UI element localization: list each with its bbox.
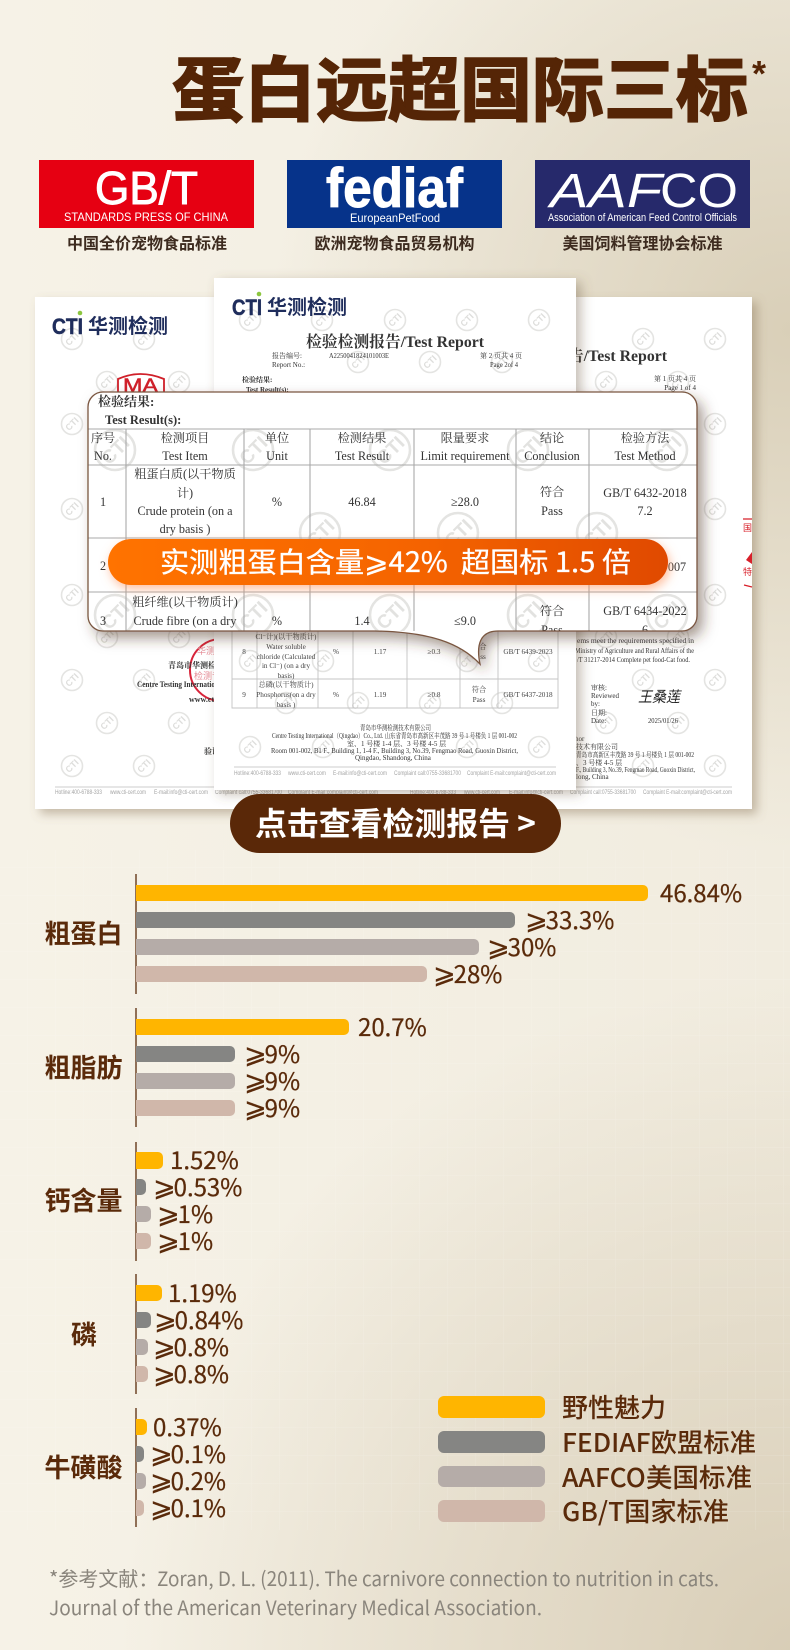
back report sheets: CTI [597,628,615,646]
back report sheets: CTI [597,373,615,391]
callout: test result table: 6 [642,623,648,637]
callout: test result table: dry basis ) [160,522,210,536]
back report sheets: CTI [170,373,188,391]
back report sheets: 检验检测报告/Test Report [489,346,668,365]
center report sheet: Complaint E-mail:complaint@cti-cert.com [467,771,556,777]
callout: test result table: Crude protein (on a [137,504,233,518]
center report sheet: 华测检测 [267,291,347,320]
back report sheets: CTI [52,314,83,339]
center report sheet: 检验检测报告/Test Report [306,332,485,351]
chart group: phosphorus [71,1274,243,1394]
center report sheet: CTI [458,738,476,756]
back report sheets: 特 [743,565,752,578]
chart group: calcium: 1.52% [170,1141,239,1176]
chart group: calcium: ⩾1% [157,1219,213,1258]
back report sheets: 技术有限公司 [576,742,618,751]
chart group: taurine: ⩾0.2% [150,1459,226,1498]
callout: test result table: 46.84 [348,495,376,509]
back report sheets: Hotline:400-6788-333 [410,790,457,796]
chart group: taurine: 0.37% [153,1408,222,1443]
back report sheets: 国 [743,521,752,534]
chart group: calcium: 钙含量 [44,1181,123,1218]
back report sheets: 第 1 页共 4 页 [654,374,696,383]
callout: test result table: % [272,614,282,628]
chart group: taurine [44,1408,226,1527]
chart group: phosphorus: ⩾0.8% [153,1325,229,1364]
callout: test result table: CTI [580,516,616,552]
center report sheet: CTI [313,311,331,329]
callout: test result table: Pass [541,504,563,518]
back report sheets: Centre Testing Internatio [137,680,215,689]
back report sheets: CTI [98,628,116,646]
callout: test result table: Conclusion [524,449,580,463]
back report sheets: 青岛市高新区丰茂路 39 号 1 号楼负 1 层 001-002 [576,750,694,759]
center report sheet: 室、1 号楼 1-4 层、3 号楼 4-5 层 [347,739,446,748]
center report sheet: 1.19 [374,691,387,699]
back report sheets: CTI [706,415,724,433]
callout: test result table: CTI [511,433,547,469]
center report sheet: CTI [349,353,367,371]
logo: fediaf: EuropeanPetFood [350,211,440,225]
center report sheet: GB/T 6439-2023 [503,648,553,656]
callout: test result table: % [272,495,282,509]
logo: fediaf [287,156,502,228]
logo: AAFCO: CO [660,165,738,218]
center report sheet: Report No.: [272,361,305,369]
chart group: phosphorus: ⩾0.8% [153,1352,229,1391]
center report sheet: 合 [479,642,487,651]
logo: AAFCO [535,160,750,228]
back report sheets: CTI [63,500,81,518]
center report sheet: Test Result(s): [246,386,289,394]
callout: test result table: 限量要求 [441,430,489,445]
legend: AAFCO美国标准 [562,1458,752,1495]
legend: GB/T国家标准 [562,1492,729,1529]
back report sheets: CTI [634,671,652,689]
chart group: crude fat [44,1008,427,1127]
center report sheet: CTI [314,738,332,756]
center report sheet: Phosphorus(on a dry [256,691,316,699]
back report sheets: Complaint call:0755-33681700 [570,790,637,796]
center report sheet: 9 [242,691,246,699]
back report sheets: Complaint E-mail:complaint@cti-cert.com [643,790,732,796]
back report sheets: CTI [98,714,116,732]
center report sheet: % [333,648,339,656]
back report sheets: E-mail:info@cti-cert.com [509,790,563,796]
center report sheet: 第 2 页共 4 页 [480,351,522,360]
callout: test result table: 2 [100,559,106,573]
back report sheets: E-mail:info@cti-cert.com [154,790,208,796]
center report sheet: 总磷(以干物质计) [258,680,314,689]
callout: test result table: 符合 [540,603,564,618]
center report sheet: Cl⁻计)(以干物质计) [256,632,317,641]
center report sheet: CTI [232,295,262,320]
callout: test result table: No. [94,449,112,463]
center report sheet: CTI [530,652,548,670]
title: * [752,53,766,94]
back report sheets: Page 1 of 4 [664,384,696,392]
chart group: crude protein: ⩾28% [433,952,502,991]
chart group: crude fat: ⩾9% [244,1059,300,1098]
back report sheets: /T 31217-2014 Complete pet food-Cat food. [577,656,690,664]
callout: test result table: 1 [100,495,106,509]
center report sheet: chloride (Calculated [257,653,316,661]
callout: test result table: 检验方法 [621,430,670,445]
center report sheet: CTI [314,652,332,670]
back report sheets: CTI [170,628,188,646]
callout: test result table: 序号 [91,430,115,445]
chart group: calcium: ⩾0.53% [153,1165,242,1204]
back report sheets: CTI [706,586,724,604]
callout: test result table: 结论 [540,430,564,445]
back report sheets: CTI [63,586,81,604]
back report sheets: 审核: [591,683,607,692]
callout: test result table: CTI [511,598,547,634]
callout: test result table: Test Result [335,449,390,463]
back report sheets: CTI [634,330,652,348]
center report sheet: 1.17 [374,648,387,656]
chart group: calcium: ⩾1% [157,1192,213,1231]
center report sheet: CTI [386,311,404,329]
chart group: crude fat: ⩾9% [244,1032,300,1071]
center report sheet: ≥0.8 [428,691,441,699]
chart group: crude protein [44,874,742,994]
back report sheets: CTI [706,757,724,775]
center report sheet: Page 2of 4 [490,361,518,369]
back report sheets: Complaint E-mail:complaint@cti-cert.com [288,790,378,796]
center report sheet: CTI [493,694,511,712]
chart group: taurine: ⩾0.1% [150,1432,226,1471]
back report sheets: Date: [591,717,606,725]
callout: test result table: 计) [177,485,193,500]
back report sheets: hor [575,735,585,743]
back report sheets: CTI [634,757,652,775]
center report sheet: % [333,691,339,699]
center report sheet: 青岛市华测检测技术有限公司 [360,723,431,732]
chart group: phosphorus: 1.19% [168,1274,237,1309]
callout: test result table: 007 [668,560,686,574]
back report sheets: by: [591,700,600,708]
center report sheet: Room 001-002, B1 F., Building 1, 1-4 F., Building 3, No.39, Fengmao Road, Guoxin District, [271,747,518,755]
back report sheets: Reviewed [591,692,619,700]
chart group: crude protein: ⩾33.3% [525,898,614,937]
center report sheet: 符合 [472,685,486,694]
back report sheets: CTI [135,671,153,689]
back report sheets: 青岛市华测检 [168,660,216,670]
callout: test result table: 单位 [265,431,289,445]
center report sheet: 8 [242,648,246,656]
callout: test result table: CTI [441,516,477,552]
center report sheet: CTI [530,311,548,329]
center report sheet: Complaint call:0755-33681700 [394,771,462,777]
back report sheets: F., Building 3, No.39, Fengmao Road, Guoxin District, [576,766,695,774]
callout: test result table: CTI [650,598,686,634]
back report sheets: 检测专 [194,669,221,682]
callout: test result table: Pass [541,623,563,637]
back report sheets: Ministry of Agriculture and Rural Affairs of the [575,647,694,655]
center report sheet [214,278,576,790]
center report sheet: www.cti-cert.com [287,771,326,777]
center report sheet: ≥0.3 [428,648,441,656]
callout: test result table: CTI [98,433,134,469]
back report sheets: CTI [597,714,615,732]
back report sheets: 日期: [591,708,607,717]
center report sheet: Hotline:400-6788-333 [234,771,282,777]
center report sheet: CTI [241,652,259,670]
center report sheet: CTI [241,738,259,756]
center report sheet: Centre Testing International（Qingdao）Co., Ltd. 山东省青岛市高新区丰茂路 39 号 1 号楼负 1 层 001-002 [272,731,517,740]
center report sheet: CTI [277,694,295,712]
button: view report: 点击查看检测报告 > [255,799,536,845]
callout: test result table [87,392,697,664]
callout: test result table: 1.4 [354,614,370,628]
callout: test result table: Limit requirement [420,449,510,463]
callout: test result table: GB/T 6432-2018 [603,486,687,500]
back report sheets: CTI [63,671,81,689]
back report sheets: CTI [706,671,724,689]
callout: test result table: CTI [303,516,339,552]
back report sheets: 华测检测 [88,310,168,339]
center report sheet: CTI [493,353,511,371]
logo: GB/T: STANDARDS PRESS OF CHINA [64,210,228,224]
callout: test result table: Test Result(s): [105,413,181,427]
back report sheets: CTI [669,373,687,391]
logo: fediaf: fediaf [326,156,463,219]
back report sheets: www.cti-cert.com [463,790,500,796]
footnote: Zoran, D. L. (2011). The carnivore connection to nutrition in cats. [157,1563,719,1592]
callout: test result table: Unit [266,449,288,463]
footnote [49,1563,719,1621]
back report sheets: 王桑莲 [638,686,683,707]
callout: test result table: ≥28.0 [451,495,479,509]
back report sheets: 验证 [204,746,220,756]
chart group: crude fat: 20.7% [358,1008,427,1043]
chart group: crude fat: 粗脂肪 [44,1048,123,1085]
legend: 野性魅力 [562,1388,666,1425]
back report sheets: 、3 号楼 4-5 层 [576,758,622,767]
callout: test result table: GB/T 6434-2022 [603,604,687,618]
center report sheet: GB/T 6437-2018 [503,691,553,699]
center report sheet: basis ) [277,701,296,709]
callout: test result table: CTI [373,433,409,469]
callout: test result table: 检验结果: [98,394,154,409]
back report sheets: CTI [63,330,81,348]
center report sheet: basis) [278,672,295,680]
back report sheets: CTI [135,757,153,775]
chart group: phosphorus: ⩾0.84% [154,1298,243,1337]
back report sheets: Complaint call:0755-33681700 [215,790,283,796]
chart group: crude protein: ⩾30% [487,925,556,964]
center report sheet: CTI [241,311,259,329]
legend: FEDIAF欧盟标准 [562,1423,756,1460]
back report sheets: www.cti [189,695,217,704]
logo: AAFCO: AAF [546,165,665,218]
callout: test result table: Test Method [614,449,676,463]
center report sheet: CTI [349,694,367,712]
center report sheet: in Cl⁻) (on a dry [262,662,310,670]
chart group: taurine: 牛磺酸 [44,1448,123,1485]
chart group: phosphorus: 磷 [71,1315,97,1352]
back report sheets: CTI [135,330,153,348]
center report sheet: CTI [421,353,439,371]
back report sheets: long, China [576,773,610,781]
callout: test result table: Test Item [162,449,208,463]
chart group: crude protein: 粗蛋白 [44,914,123,951]
caption: fediaf: 欧洲宠物食品贸易机构 [314,230,475,254]
chart group: calcium [44,1141,242,1261]
callout: test result table: Crude fibre (on a dry [134,614,237,628]
caption: AAFCO: 美国饲料管理协会标准 [562,230,723,254]
center report sheet: E-mail:info@cti-cert.com [333,771,387,777]
back report sheets: CTI [170,714,188,732]
center report sheet: Water soluble [266,643,306,651]
chart group: crude fat: ⩾9% [244,1086,300,1125]
callout headline pill: 实测粗蛋白含量⩾42% 超国标 1.5 倍 [160,541,631,581]
back report sheets: 华测检 [197,644,224,657]
callout: test result table: 7.2 [637,504,653,518]
callout: test result table: 粗纤维(以干物质计) [132,594,238,609]
callout: test result table: CTI [98,598,134,634]
caption: GB/T: 中国全价宠物食品标准 [67,230,227,254]
back report sheets: MA [123,376,158,397]
button: view report [230,794,561,853]
center report sheet: CTI [530,738,548,756]
callout: test result table: 检测结果 [338,430,386,445]
back report sheets: CTI [706,500,724,518]
center report sheet: CTI [458,311,476,329]
footnote: Journal of the American Veterinary Medical Association. [49,1592,542,1621]
logo: GB/T [39,160,254,228]
back report sheets: ems meet the requirements specified in [577,637,695,645]
center report sheet: ss [480,653,486,661]
footnote: *参考文献： [49,1563,158,1592]
callout: test result table: CTI [236,433,272,469]
back report sheets: Hotline:400-6788-333 [55,790,103,796]
back report sheets: 2025/01/26 [648,717,678,725]
callout: test result table: 符合 [540,484,564,499]
legend [438,1388,756,1529]
callout: test result table: 粗蛋白质(以干物质 [134,466,236,481]
callout: test result table: CTI [650,433,686,469]
chart group: crude protein: 46.84% [660,874,742,909]
back report sheets: www.cti-cert.com [109,790,146,796]
back report sheets: CTI [669,628,687,646]
center report sheet: A2250041824101003E [329,352,389,360]
center report sheet: 检验结果: [242,375,272,384]
callout: test result table: CTI [373,598,409,634]
center report sheet: Qingdao, Shandong, China [355,754,432,762]
chart group: taurine: ⩾0.1% [150,1486,226,1525]
callout: test result table: 检测项目 [161,430,209,445]
back report sheets: CTI [63,415,81,433]
callout: test result table: 3 [100,614,106,628]
back report sheets [35,297,752,809]
back report sheets: CTI [63,757,81,775]
center report sheet: CTI [421,694,439,712]
back report sheets: CTI [98,373,116,391]
center report sheet: CTI [458,652,476,670]
center report sheet: 报告编号: [272,351,302,360]
title: 蛋白远超国际三标 [172,35,748,136]
back report sheets: CTI [669,714,687,732]
callout: test result table: ≤9.0 [454,614,476,628]
logo: GB/T: GB/T [95,162,198,214]
callout: test result table: CTI [236,598,272,634]
center report sheet: Pass [473,696,486,704]
logo: AAFCO: Association of American Feed Control Officials [548,212,737,224]
back report sheets: CTI [706,330,724,348]
